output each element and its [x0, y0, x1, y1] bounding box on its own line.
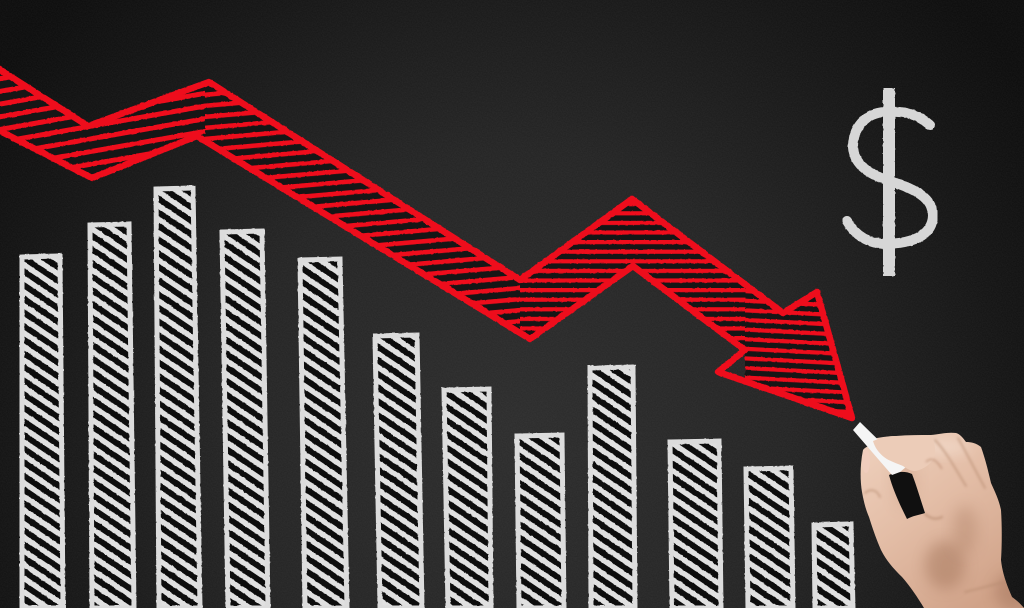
bar 7: [444, 389, 491, 608]
gap between thumb and fingers: [889, 472, 925, 519]
bar chart: [22, 188, 853, 608]
index finger: [873, 436, 935, 471]
bar 5: [300, 259, 347, 608]
bar 6: [375, 335, 422, 608]
bar 1: [22, 256, 63, 608]
icon: hand holding chalk: [853, 422, 1024, 608]
red down arrow: [0, 50, 860, 425]
bar 10: [670, 441, 721, 608]
bar 9: [590, 367, 635, 608]
bar 8: [517, 435, 564, 608]
bar 3: [156, 188, 200, 608]
bar 4: [222, 231, 268, 608]
bar 12: [814, 524, 853, 608]
bar 11: [746, 468, 793, 608]
bar 2: [90, 224, 134, 608]
hand: [855, 425, 1024, 608]
chalk: [853, 422, 906, 475]
icon: dollar sign: [847, 88, 933, 276]
